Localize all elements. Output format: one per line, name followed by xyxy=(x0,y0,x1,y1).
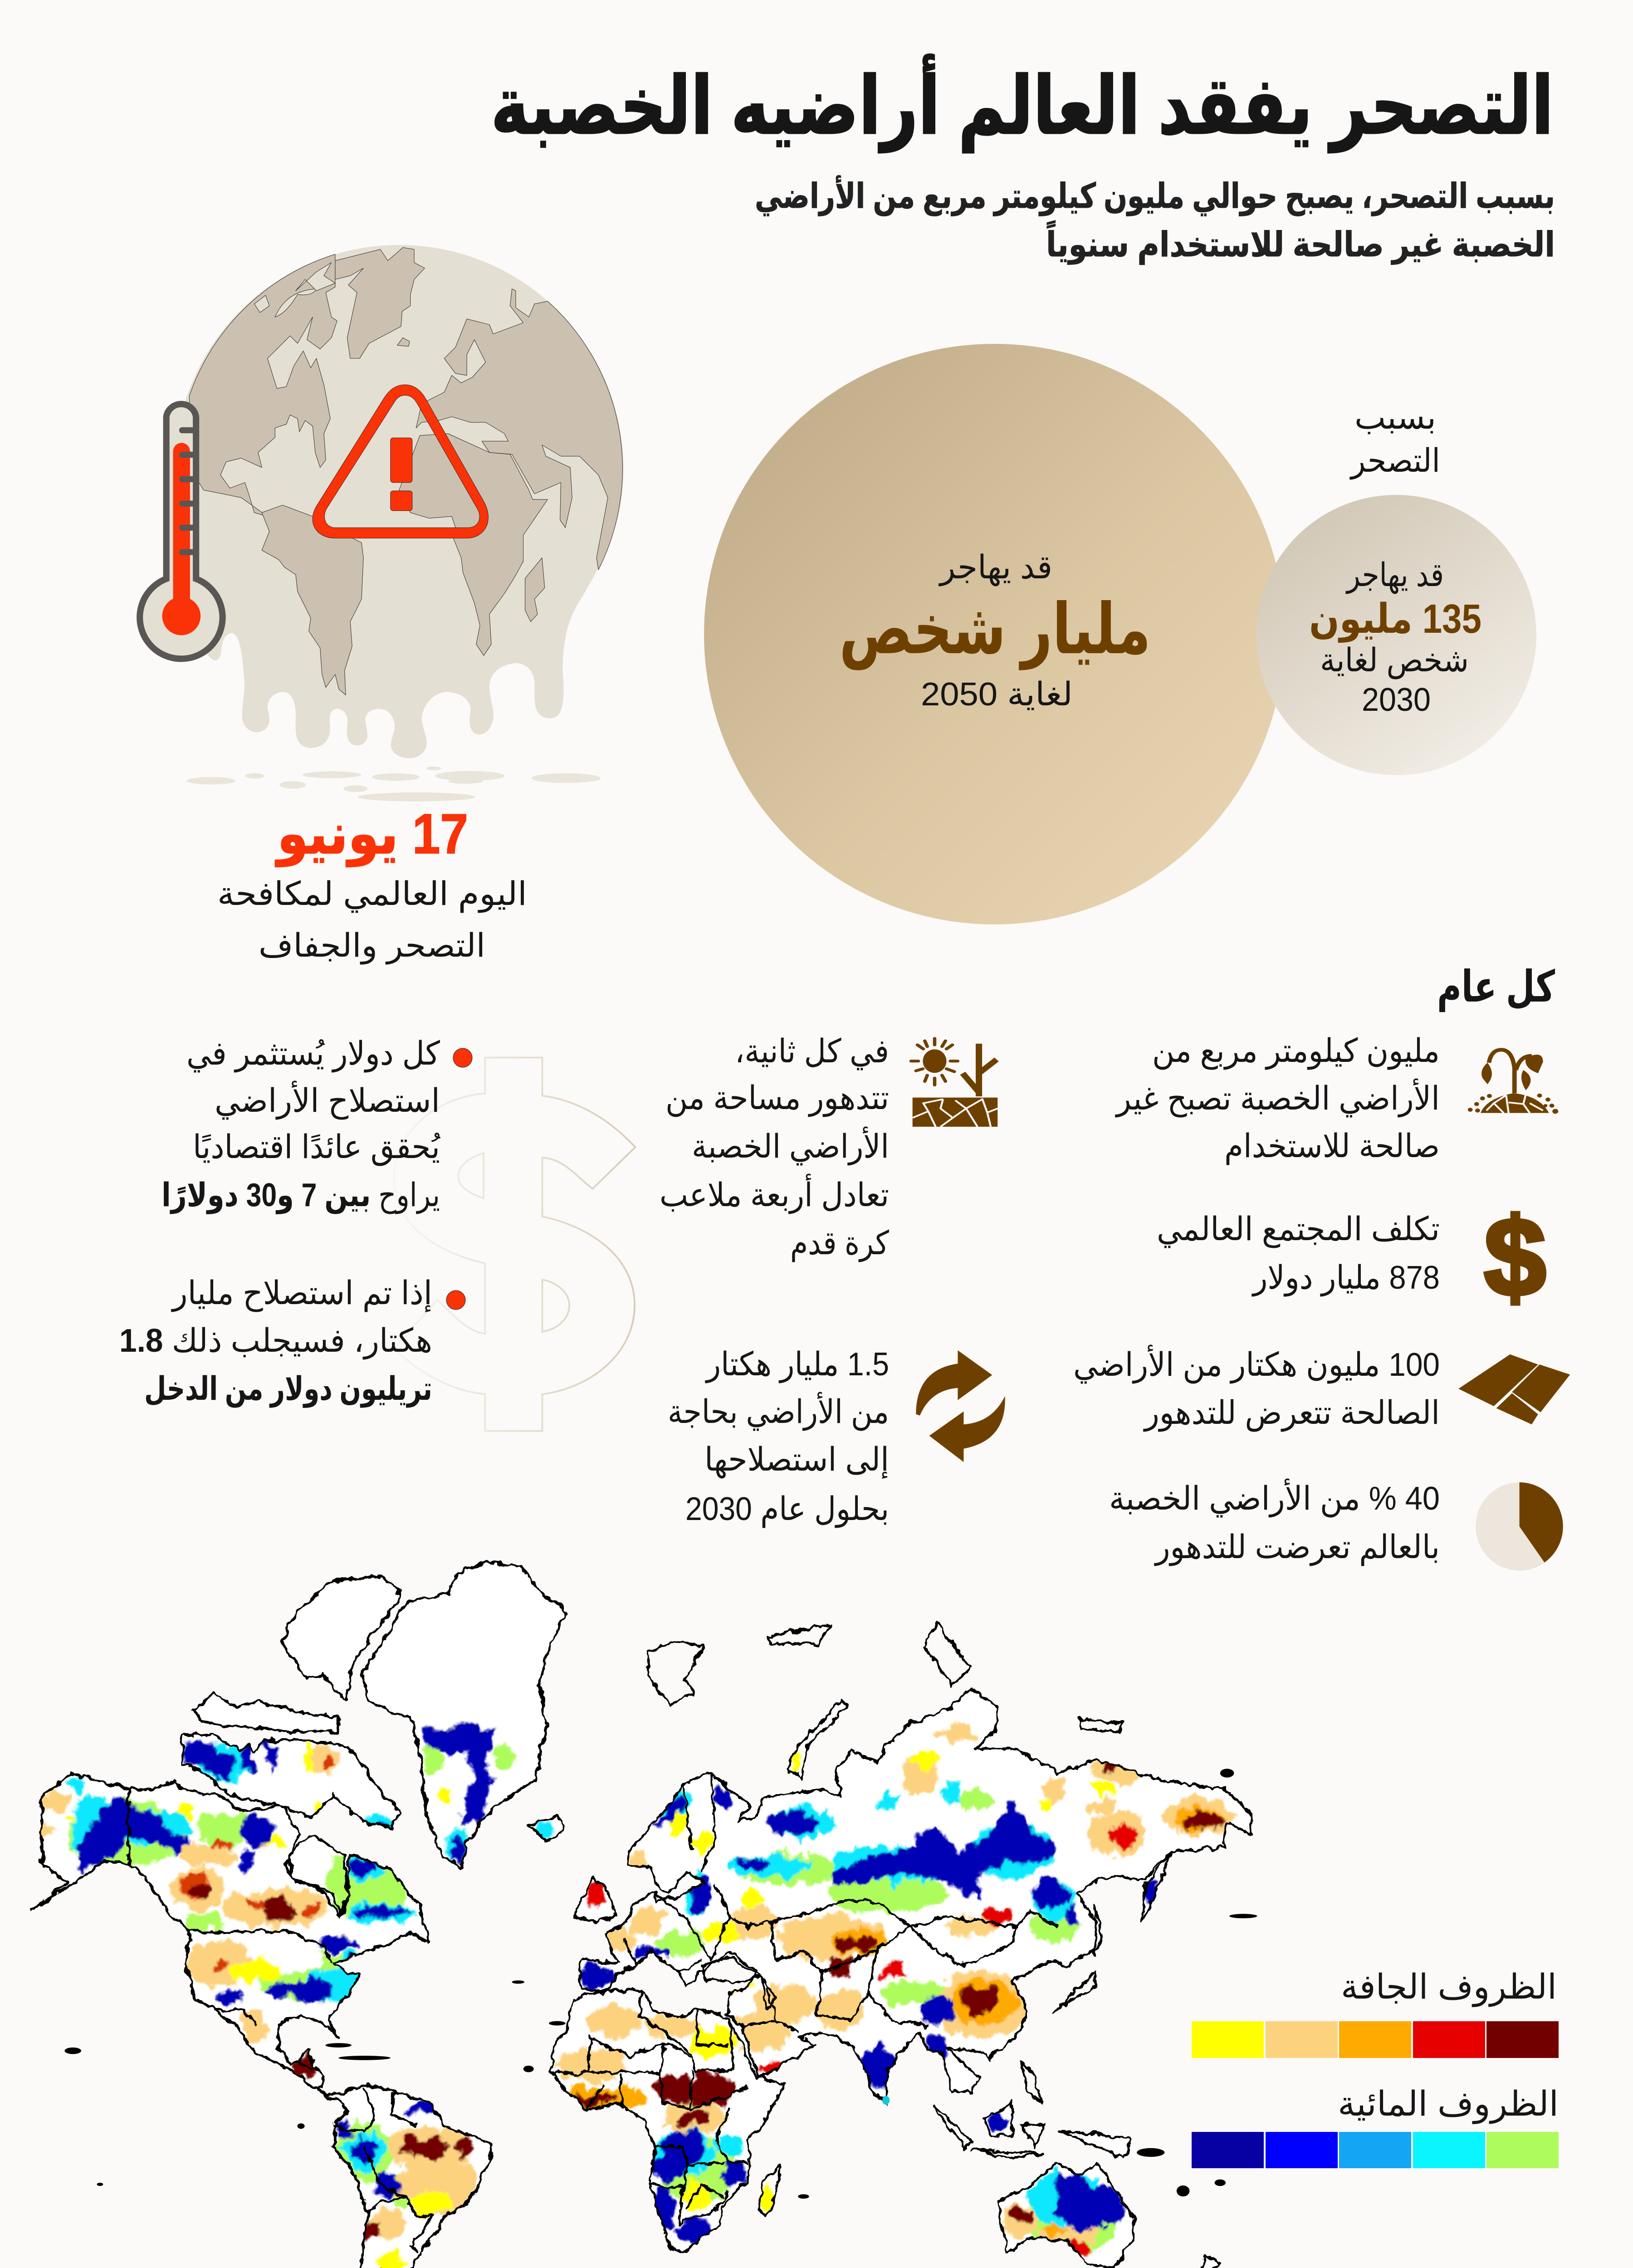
icon: thermometer xyxy=(140,404,223,659)
small circle: 135 million people: 135 مليون xyxy=(1309,596,1481,643)
text: every second: كرة قدم xyxy=(790,1225,890,1262)
text: yearly facts: بالعالم تعرضت للتدهور xyxy=(1154,1529,1440,1566)
big circle: one billion people: مليار شخص xyxy=(839,590,1151,670)
big circle: one billion people: قد يهاجر xyxy=(939,549,1052,587)
icon: land plots xyxy=(1458,1354,1570,1424)
text: every second: الأراضي الخصبة xyxy=(692,1126,889,1166)
text: 1.5 billion hectares: إلى استصلاحها xyxy=(704,1442,889,1479)
legend: wet conditions: الظروف المائية xyxy=(1338,2085,1559,2124)
icon: warning triangle xyxy=(313,385,488,538)
small circle: 135 million people: قد يهاجر xyxy=(1345,557,1444,594)
map: Americas and Greenland xyxy=(30,1559,568,2268)
label: because of desertification: التصحر xyxy=(1349,443,1440,480)
small circle: 135 million people: 2030 xyxy=(1362,682,1431,718)
subtitle: الخصبة غير صالحة للاستخدام سنوياً xyxy=(1046,220,1555,265)
bullet list: returns on investment: كل دولار يُستثمر في xyxy=(186,1036,440,1073)
bullet list: returns on investment: يراوح بين 7 و30 دولارًا xyxy=(161,1177,440,1214)
big circle: one billion people: لغاية 2050 xyxy=(921,676,1073,713)
icon: faded dollar outline xyxy=(394,1058,636,1431)
label: because of desertification: بسبب xyxy=(1354,400,1436,436)
text: every second: تعادل أربعة ملاعب xyxy=(660,1173,889,1214)
small circle: 135 million people: شخص لغاية xyxy=(1320,642,1469,679)
small circle: 135 million people xyxy=(1256,495,1536,775)
icon: sun, dead tree and cracked soil xyxy=(911,1038,997,1127)
illustration: melting globe with thermometer and warning sign xyxy=(140,245,624,802)
melt puddles xyxy=(186,767,601,802)
text: yearly facts xyxy=(1073,1033,1440,1566)
legend: dry conditions: الظروف الجافة xyxy=(1341,1968,1557,2007)
text: yearly facts: الصالحة تتعرض للتدهور xyxy=(1143,1395,1440,1432)
label: because of desertification xyxy=(1349,400,1440,480)
icon: pie chart 40 percent xyxy=(1476,1482,1563,1571)
icon: recycling arrows xyxy=(916,1350,1005,1462)
world drought map xyxy=(31,1542,1257,2268)
heading: every year: كل عام xyxy=(1437,963,1555,1012)
text: yearly facts: 40 % من الأراضي الخصبة xyxy=(1109,1478,1440,1518)
icon: dollar: $ xyxy=(1484,1195,1546,1319)
text: yearly facts: 878 مليار دولار xyxy=(1252,1260,1440,1297)
subtitle xyxy=(755,175,1555,265)
text: every second: في كل ثانية، xyxy=(735,1033,889,1070)
text: 1.5 billion hectares: من الأراضي بحاجة xyxy=(668,1392,889,1431)
melting globe body xyxy=(175,245,624,758)
world day text: التصحر والجفاف xyxy=(259,928,485,965)
legend: dry conditions xyxy=(1192,1968,1559,2058)
world day text: اليوم العالمي لمكافحة xyxy=(217,876,527,913)
date heading: 17 June: 17 يونيو xyxy=(275,803,468,867)
text: 1.5 billion hectares: بحلول عام 2030 xyxy=(685,1491,889,1528)
bullet list: returns on investment xyxy=(119,1036,472,1408)
land masses on globe xyxy=(189,248,622,695)
world day text xyxy=(217,876,527,965)
text: yearly facts: مليون كيلومتر مربع من xyxy=(1152,1033,1440,1070)
bullet list: returns on investment: إذا تم استصلاح مليار xyxy=(171,1275,432,1312)
legend: wet conditions xyxy=(1192,2085,1559,2168)
text: yearly facts: تكلف المجتمع العالمي xyxy=(1157,1211,1440,1248)
big circle: one billion people xyxy=(704,344,1285,924)
bullet list: returns on investment: استصلاح الأراضي xyxy=(215,1080,440,1120)
text: yearly facts: الأراضي الخصبة تصبح غير xyxy=(1115,1078,1440,1118)
bullet list: returns on investment: يُحقق عائدًا اقتصاديًا xyxy=(193,1129,440,1166)
icon: wilting plant xyxy=(1468,1050,1558,1114)
text: 1.5 billion hectares: 1.5 مليار هكتار xyxy=(705,1346,889,1383)
text: 1.5 billion hectares xyxy=(668,1346,889,1528)
text: every second: تتدهور مساحة من xyxy=(665,1080,889,1117)
bullet list: returns on investment: تريليون دولار من الدخل xyxy=(144,1371,432,1408)
text: yearly facts: صالحة للاستخدام xyxy=(1224,1128,1440,1165)
text: every second xyxy=(660,1033,890,1262)
bullet list: returns on investment: هكتار، فسيجلب ذلك 1.8 xyxy=(119,1323,432,1360)
map: Eurasia, Africa and Oceania xyxy=(551,1622,1257,2268)
text: yearly facts: 100 مليون هكتار من الأراضي xyxy=(1073,1344,1440,1384)
